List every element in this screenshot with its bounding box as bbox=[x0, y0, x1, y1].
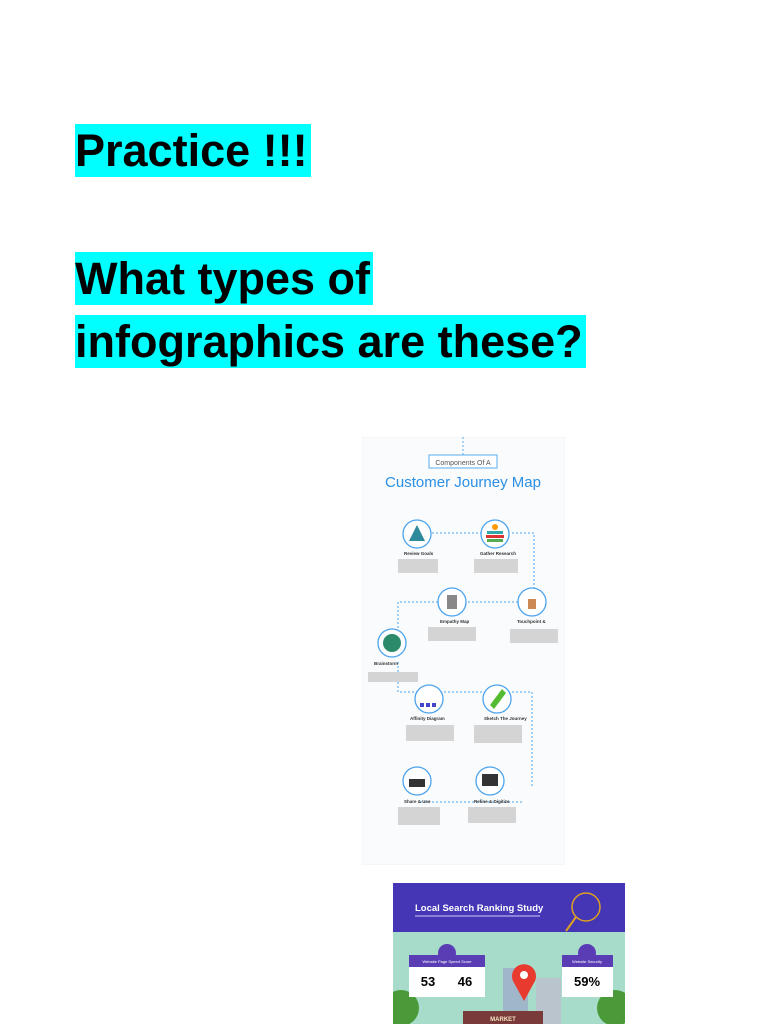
infographic: local search ranking study: Local Search Ranking Study bbox=[415, 903, 544, 914]
card security bbox=[562, 944, 613, 997]
heading: practice: Practice !!! bbox=[75, 125, 308, 176]
steps bbox=[378, 520, 546, 795]
infographic: customer journey map bbox=[362, 437, 565, 865]
header box: Components Of A bbox=[435, 460, 491, 467]
card speed bbox=[409, 944, 485, 997]
heading: question: What types of bbox=[75, 253, 370, 304]
header band bbox=[393, 883, 625, 932]
path bbox=[398, 533, 534, 802]
infographic: customer journey map: Sketch The Journey bbox=[484, 716, 527, 721]
infographic: customer journey map: Gather Research bbox=[480, 551, 516, 556]
header box bbox=[429, 437, 497, 468]
infographic: customer journey map: Review Goals bbox=[404, 551, 434, 556]
infographic: customer journey map: Touchpoint & bbox=[517, 619, 546, 624]
infographic: customer journey map: Affinity Diagram bbox=[410, 716, 445, 721]
heading: question bbox=[75, 252, 586, 368]
infographic: local search ranking study: MARKET bbox=[490, 1017, 516, 1023]
infographic: customer journey map: Brainstorm bbox=[374, 661, 398, 666]
infographic: customer journey map: Refine & Digitize bbox=[474, 799, 510, 804]
infographic: customer journey map: Empathy Map bbox=[440, 619, 470, 624]
infographic: customer journey map: Share & Use bbox=[404, 799, 431, 804]
card security: Website Security bbox=[572, 959, 602, 964]
heading: question: infographics are these? bbox=[75, 316, 583, 367]
card speed: 46 bbox=[458, 974, 472, 989]
pin bbox=[512, 964, 536, 1001]
title: Customer Journey Map bbox=[385, 474, 541, 491]
buildings bbox=[503, 968, 528, 1024]
card speed: Website Page Speed Score bbox=[422, 959, 472, 964]
infographic: local search ranking study bbox=[393, 883, 625, 1024]
card security: 59% bbox=[574, 974, 600, 989]
card speed: 53 bbox=[421, 974, 435, 989]
